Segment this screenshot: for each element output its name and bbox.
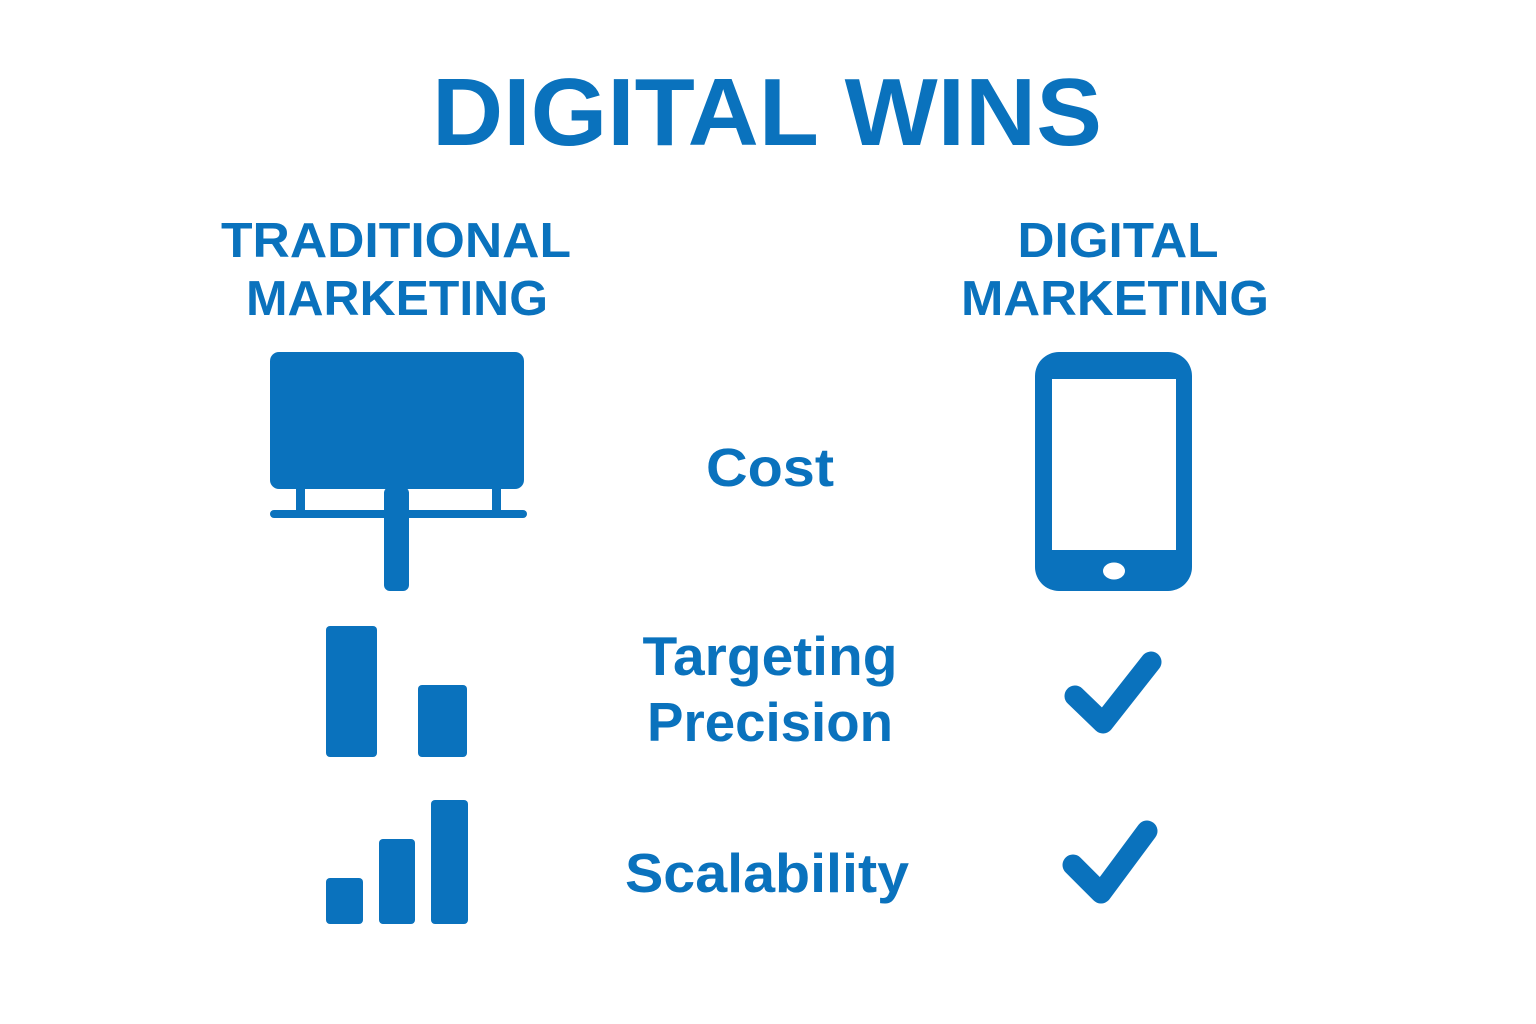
heading: traditional marketing: MARKETING [246, 272, 548, 326]
heading: digital marketing: MARKETING [961, 272, 1269, 326]
heading: traditional marketing [221, 214, 571, 326]
icon: check mark for targeting precision [1075, 662, 1151, 723]
icon: billboard [270, 352, 527, 591]
label: targeting precision: Targeting [642, 625, 898, 687]
heading: traditional marketing: TRADITIONAL [221, 214, 571, 268]
icon: short bars [326, 626, 467, 757]
heading: digital marketing [961, 214, 1269, 326]
icon: rising bars [326, 800, 468, 924]
icon: check mark for scalability [1073, 831, 1147, 893]
label: targeting precision [642, 625, 898, 753]
label: cost: Cost [706, 438, 834, 498]
icon: smartphone [1035, 352, 1192, 591]
title: DIGITAL WINS [432, 59, 1102, 166]
label: targeting precision: Precision [647, 691, 893, 753]
heading: digital marketing: DIGITAL [1018, 214, 1218, 268]
label: scalability: Scalability [625, 842, 909, 904]
